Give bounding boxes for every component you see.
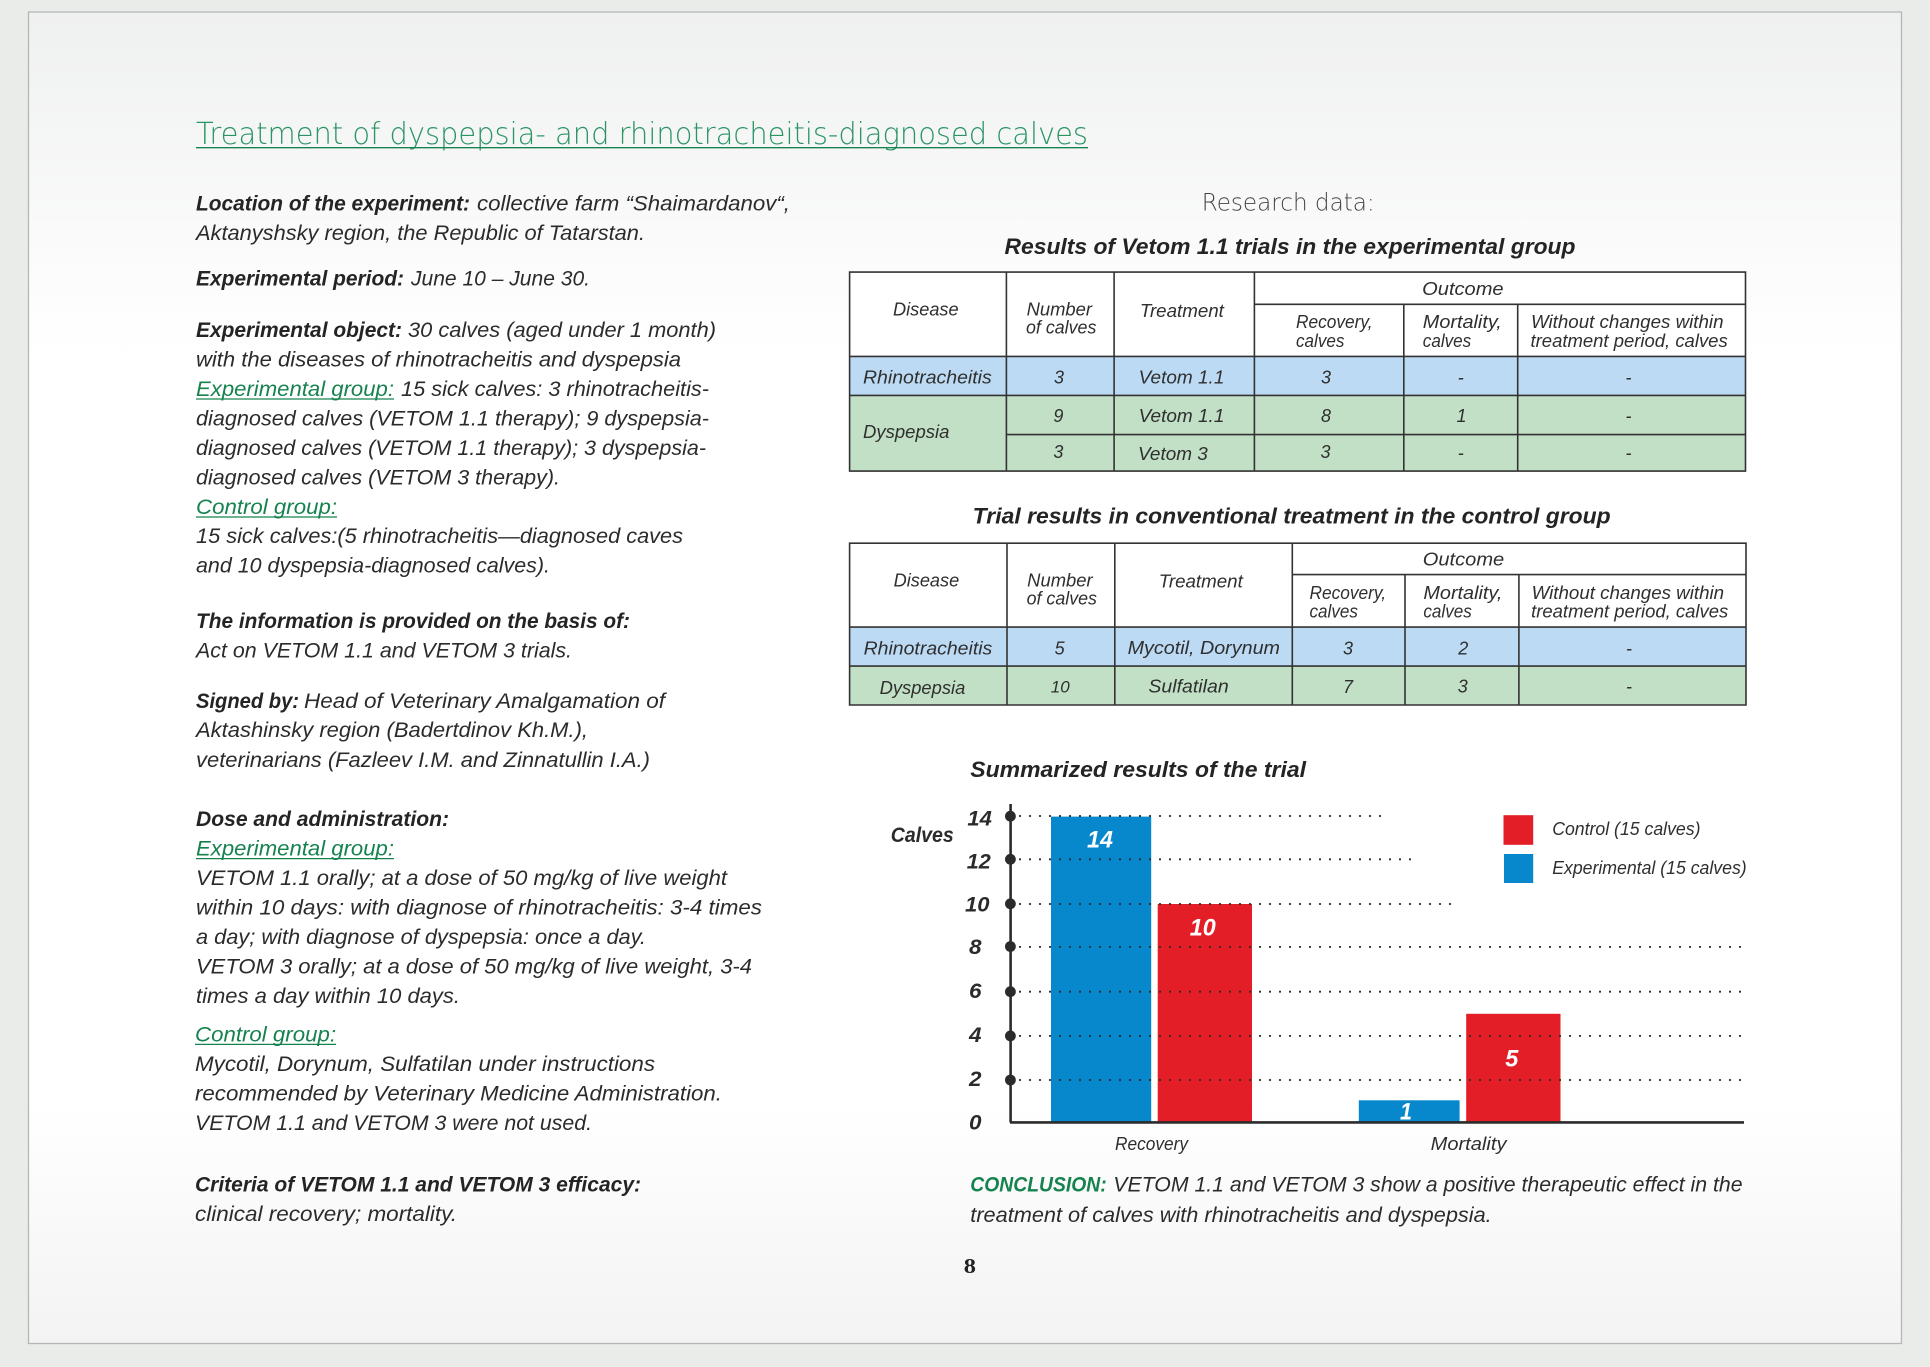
experimental object [196, 319, 716, 578]
table 1 dyspepsia rows: 1 [1456, 406, 1467, 426]
y axis labels: 12 [967, 850, 991, 874]
dose and administration: VETOM 1.1 orally; at a dose of 50 mg/kg of live weight [196, 867, 728, 890]
table 2 dyspepsia row: Sulfatilan [1148, 676, 1229, 696]
information basis: The information is provided on the basis of: [196, 610, 630, 633]
experimental period: June 10 – June 30. [410, 268, 590, 291]
y axis labels: 14 [967, 806, 992, 830]
table 1 rhinotracheitis row: 3 [1321, 368, 1331, 388]
experimental object: diagnosed calves (VETOM 1.1 therapy); 9 dyspepsia- [196, 408, 709, 431]
experimental object: 30 calves (aged under 1 month) [408, 319, 716, 342]
conclusion: VETOM 1.1 and VETOM 3 show a positive therapeutic effect in the [1113, 1174, 1743, 1197]
bar chart [891, 804, 1747, 1154]
table 2 dyspepsia row: 3 [1458, 676, 1468, 696]
table 1 rhinotracheitis row [863, 367, 1632, 388]
bar value labels [1087, 826, 1519, 1125]
y axis title: Calves [891, 823, 954, 847]
bar: mortality control [1466, 1014, 1560, 1122]
table 2 rhinotracheitis row: 5 [1055, 638, 1066, 658]
dose and administration: Experimental group: [196, 838, 394, 861]
signed by [194, 690, 667, 772]
x axis labels: Mortality [1431, 1134, 1508, 1154]
chart axes [1010, 804, 1744, 1122]
bar: mortality experimental [1359, 1100, 1460, 1122]
efficacy criteria [195, 1174, 641, 1226]
y axis labels: 10 [965, 893, 990, 917]
research data heading: Research data: [1202, 188, 1375, 216]
table 1 header row [893, 279, 1728, 351]
table 1 header row: Treatment [1140, 301, 1225, 321]
table 2 dyspepsia row: 7 [1343, 677, 1354, 697]
table 2 rhinotracheitis row: - [1626, 638, 1632, 658]
conclusion: CONCLUSION: [970, 1174, 1107, 1197]
experimental object: Experimental group: [196, 378, 394, 401]
table 1 rhinotracheitis row: Vetom 1.1 [1139, 367, 1224, 387]
y axis labels: 0 [969, 1111, 982, 1135]
dose and administration: Control group: [195, 1023, 336, 1046]
experimental object: Control group: [196, 496, 337, 519]
information basis: Act on VETOM 1.1 and VETOM 3 trials. [194, 639, 572, 662]
table 1 dyspepsia rows: Vetom 3 [1138, 444, 1208, 464]
bar value labels: 14 [1087, 826, 1113, 853]
table 1 dyspepsia rows: Dyspepsia [863, 422, 949, 442]
table 1 dyspepsia rows: 3 [1320, 442, 1331, 462]
table 1 dyspepsia rows [863, 406, 1632, 464]
table 2 header row: of calves [1027, 588, 1097, 608]
experimental object: and 10 dyspepsia-diagnosed calves). [196, 554, 550, 578]
x axis labels: Recovery [1115, 1134, 1189, 1154]
table 1 dyspepsia rows: - [1458, 443, 1464, 463]
bar value labels: 1 [1400, 1098, 1412, 1125]
table 1 rhinotracheitis row: - [1626, 368, 1632, 388]
table 1 rhinotracheitis row: 3 [1054, 368, 1064, 388]
table 1 header row: of calves [1026, 318, 1096, 338]
experimental object: diagnosed calves (VETOM 1.1 therapy); 3 dyspepsia- [196, 437, 706, 460]
signed by: Head of Veterinary Amalgamation of [304, 690, 667, 713]
table 1 header row: calves [1296, 331, 1344, 351]
table 1 dyspepsia rows: 3 [1053, 442, 1063, 462]
y axis labels: 2 [968, 1067, 982, 1091]
bar: recovery control [1158, 904, 1252, 1122]
efficacy criteria: Criteria of VETOM 1.1 and VETOM 3 efficacy: [195, 1174, 641, 1197]
table 1 header row: Outcome [1422, 279, 1504, 299]
page number: 8 [964, 1254, 976, 1278]
bar: recovery experimental [1051, 817, 1151, 1122]
table 1 dyspepsia rows: - [1626, 443, 1632, 463]
y axis labels: 4 [968, 1023, 982, 1047]
table 2 header row: calves [1310, 602, 1358, 622]
table 1 header row: treatment period, calves [1530, 331, 1728, 351]
table 1 rhinotracheitis row: - [1458, 368, 1464, 388]
table 2 header row [894, 550, 1728, 622]
table 2 rhinotracheitis row: 2 [1457, 638, 1468, 658]
table 2 header row: Recovery, [1310, 583, 1386, 603]
information basis [194, 610, 630, 662]
table 1 header row: Number [1027, 300, 1093, 320]
legend: Control (15 calves) [1552, 819, 1700, 839]
efficacy criteria: clinical recovery; mortality. [195, 1203, 457, 1226]
experimental period [196, 268, 590, 291]
dose and administration: Mycotil, Dorynum, Sulfatilan under instructions [195, 1053, 656, 1076]
table 2 rhinotracheitis row: Mycotil, Dorynum [1128, 638, 1280, 658]
table 2 header row: Disease [894, 570, 959, 590]
y axis labels: 6 [969, 979, 983, 1003]
table 2 rhinotracheitis row: 3 [1343, 638, 1353, 658]
table 1 header row: calves [1423, 331, 1471, 351]
table 2 dyspepsia row: 10 [1051, 678, 1070, 696]
table 2 header row: Mortality, [1423, 583, 1502, 603]
location of the experiment: Location of the experiment: [196, 193, 470, 216]
bar value labels: 10 [1190, 914, 1216, 941]
table 2 rhinotracheitis row: Rhinotracheitis [864, 638, 992, 658]
table 1 heading: Results of Vetom 1.1 trials in the experimental group [1004, 234, 1576, 259]
table 2 header row: calves [1423, 602, 1472, 622]
location of the experiment: collective farm “Shaimardanov“, [477, 193, 790, 216]
legend [1504, 815, 1747, 883]
dose and administration: times a day within 10 days. [196, 985, 460, 1008]
left column text [194, 193, 790, 1226]
dose and administration: recommended by Veterinary Medicine Administration. [195, 1083, 722, 1106]
table 1 rhinotracheitis row: Rhinotracheitis [863, 368, 992, 388]
location of the experiment: Aktanyshsky region, the Republic of Tatarstan. [194, 222, 645, 245]
experimental object: with the diseases of rhinotracheitis and dyspepsia [196, 349, 681, 372]
table 1 header row: Disease [893, 300, 959, 320]
table 1 dyspepsia rows: 9 [1053, 406, 1063, 426]
table 2 header row: Outcome [1423, 550, 1504, 570]
table 2 rhinotracheitis row [864, 638, 1632, 658]
signed by: Signed by: [196, 690, 299, 713]
table 2: control group [850, 543, 1746, 705]
chart heading: Summarized results of the trial [970, 757, 1307, 782]
conclusion [970, 1174, 1743, 1227]
table 2 header row: Treatment [1159, 572, 1244, 592]
table 2 dyspepsia row: Dyspepsia [880, 678, 965, 698]
title: Treatment of dyspepsia- and rhinotracheitis-diagnosed calves [196, 117, 1088, 152]
dose and administration: Dose and administration: [196, 808, 449, 831]
y axis labels: 8 [969, 935, 982, 959]
signed by: veterinarians (Fazleev I.M. and Zinnatullin I.A.) [196, 749, 650, 772]
experimental object: diagnosed calves (VETOM 3 therapy). [196, 466, 560, 490]
table 1 dyspepsia rows: 8 [1321, 406, 1331, 426]
legend: Experimental (15 calves) [1552, 858, 1747, 878]
bar value labels: 5 [1505, 1046, 1519, 1073]
dose and administration [195, 808, 763, 1135]
experimental object: Experimental object: [196, 319, 402, 342]
table 1: experimental group [850, 272, 1746, 471]
experimental period: Experimental period: [196, 268, 404, 291]
y axis labels [965, 806, 992, 1135]
dose and administration: within 10 days: with diagnose of rhinotracheitis: 3-4 times [196, 897, 763, 920]
table 2 header row: treatment period, calves [1531, 602, 1728, 622]
x axis labels [1115, 1134, 1508, 1154]
table 1 header row: Without changes within [1531, 312, 1724, 332]
dose and administration: a day; with diagnose of dyspepsia: once a day. [196, 926, 646, 949]
dose and administration: VETOM 3 orally; at a dose of 50 mg/kg of live weight, 3-4 [196, 956, 752, 979]
conclusion: treatment of calves with rhinotracheitis and dyspepsia. [970, 1204, 1492, 1227]
table 2 dyspepsia row: - [1626, 676, 1632, 696]
table 2 header row: Number [1027, 570, 1094, 590]
table 2 dyspepsia row [880, 676, 1632, 698]
experimental object: 15 sick calves:(5 rhinotracheitis—diagnosed caves [196, 525, 684, 548]
table 1 dyspepsia rows: Vetom 1.1 [1139, 406, 1224, 426]
experimental object: 15 sick calves: 3 rhinotracheitis- [401, 378, 709, 401]
dose and administration: VETOM 1.1 and VETOM 3 were not used. [195, 1112, 592, 1135]
table 1 header row: Mortality, [1423, 312, 1502, 332]
table 1 header row: Recovery, [1296, 312, 1373, 332]
table 1 dyspepsia rows: - [1626, 406, 1632, 426]
location of the experiment [194, 193, 790, 245]
axis tick dots [1005, 811, 1016, 1085]
signed by: Aktashinsky region (Badertdinov Kh.M.), [194, 719, 588, 742]
table 2 heading: Trial results in conventional treatment in the control group [973, 504, 1611, 529]
table 2 header row: Without changes within [1532, 583, 1724, 603]
